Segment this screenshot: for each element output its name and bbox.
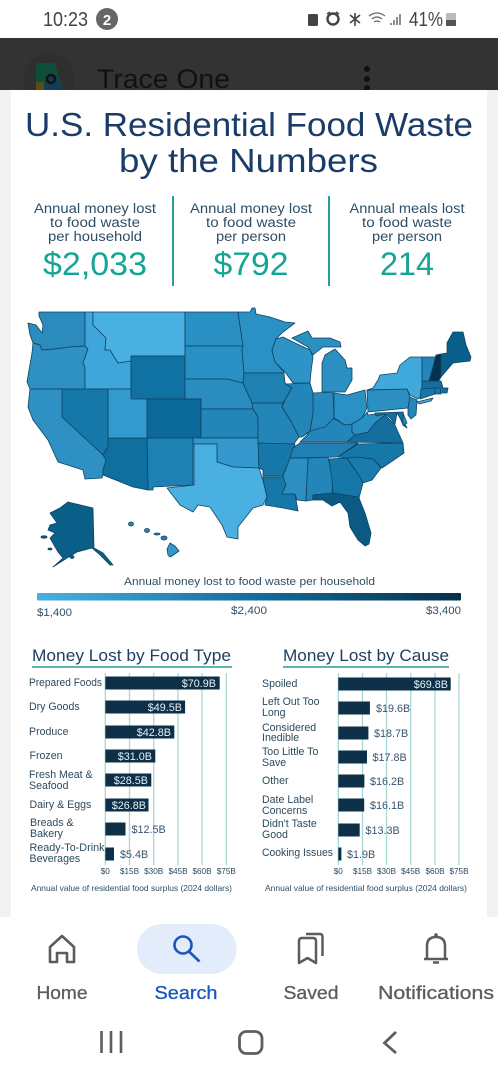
stat: meals: 214 <box>380 246 434 282</box>
chart: money lost by food type: $31.0B <box>118 751 152 763</box>
chart: money lost by cause: $16.2B <box>370 776 404 788</box>
stat: per person money: to food waste <box>206 215 296 230</box>
chart: money lost by cause: $30B <box>377 867 397 876</box>
chart: money lost by food type: Produce <box>29 726 69 738</box>
chart: money lost by cause: $15B <box>353 867 373 876</box>
chart: money lost by food type: $45B <box>168 867 188 876</box>
stat: per household <box>34 201 156 282</box>
chart: money lost by cause: Too Little To <box>262 746 318 758</box>
chart: money lost by food type: $28.5B <box>114 775 148 787</box>
nav item: home: Home <box>36 982 88 1003</box>
legend: household gradient scale: $1,400 <box>37 607 72 619</box>
chart: money lost by food type: Seafood <box>29 780 69 792</box>
chart: money lost by food type: $5.4B <box>120 849 148 861</box>
chart: money lost by food type: $0 <box>101 867 110 876</box>
chart heading: food type: Money Lost by Food Type <box>32 646 231 665</box>
dimmed app header: Trace One <box>97 64 230 94</box>
stat: meals: Annual meals lost <box>350 201 465 216</box>
title: U.S. Residential Food Waste <box>25 107 473 144</box>
chart: money lost by food type: Dry Goods <box>29 701 80 713</box>
android system buttons <box>102 1031 396 1054</box>
page background margins <box>0 90 498 917</box>
chart: money lost by cause: Concerns <box>262 805 307 817</box>
status bar: 2 <box>103 12 111 29</box>
chart: money lost by food type: $30B <box>144 867 164 876</box>
stat: per household: per household <box>48 229 142 244</box>
stat: per person money: Annual money lost <box>190 201 312 216</box>
status bar: 41% <box>409 9 443 31</box>
stat: per person money: per person <box>216 229 286 244</box>
chart: money lost by food type: $12.5B <box>132 824 166 836</box>
chart: money lost by food type: Fresh Meat & <box>29 769 93 781</box>
chart: money lost by cause: $16.1B <box>370 800 404 812</box>
stat: per person money <box>190 201 312 282</box>
dimmed app header <box>0 38 498 90</box>
chart: money lost by cause: $13.3B <box>366 825 400 837</box>
stat: per household: to food waste <box>50 215 140 230</box>
chart: money lost by cause: Save <box>262 757 286 769</box>
chart: money lost by cause: Annual value of residential food surplus (2024 dollars) <box>265 884 467 893</box>
nav item: notifications <box>378 933 494 1003</box>
chart: money lost by cause: $75B <box>449 867 469 876</box>
status bar <box>0 0 498 38</box>
map inset: Hawaii <box>128 522 179 557</box>
legend: household gradient scale: Annual money lost to food waste per household <box>124 576 375 588</box>
title <box>25 107 473 180</box>
chart: money lost by food type: $70.9B <box>182 678 216 690</box>
chart: money lost by cause: Didn't Taste <box>262 818 317 830</box>
chart: money lost by cause: Other <box>262 775 289 787</box>
chart: money lost by cause: $18.7B <box>374 728 408 740</box>
stat: per household: Annual money lost <box>34 201 156 216</box>
chart: money lost by food type: $26.8B <box>112 800 146 812</box>
chart: money lost by food type: Beverages <box>30 853 80 865</box>
chart heading: cause: Money Lost by Cause <box>283 646 449 665</box>
chart: money lost by food type <box>29 646 236 893</box>
stat: per household: $2,033 <box>43 246 147 282</box>
stat: meals <box>350 201 465 282</box>
chart: money lost by cause: $69.8B <box>414 679 448 691</box>
chart: money lost by food type: Annual value of residential food surplus (2024 dollars) <box>31 884 232 893</box>
status bar: 10:23 <box>43 9 88 31</box>
chart: money lost by food type: $15B <box>120 867 140 876</box>
chart: money lost by cause: Considered <box>262 722 316 734</box>
chart: money lost by cause: Spoiled <box>262 678 297 690</box>
chart: money lost by cause: $60B <box>425 867 445 876</box>
stat: meals: to food waste <box>362 215 452 230</box>
chart: money lost by food type: $49.5B <box>148 702 182 714</box>
chart: money lost by food type: Prepared Foods <box>29 677 102 689</box>
chart: money lost by food type: Breads & <box>30 817 74 829</box>
chart: money lost by cause: Date Label <box>262 794 313 806</box>
chart: money lost by food type: $60B <box>192 867 212 876</box>
chart: money lost by cause: Good <box>262 829 288 841</box>
chart: money lost by food type: $75B <box>217 867 236 876</box>
chart: money lost by cause: $19.6B <box>376 703 410 715</box>
legend: household gradient scale <box>37 576 461 619</box>
chart: money lost by cause: Left Out Too <box>262 696 320 708</box>
chart: money lost by cause: $0 <box>334 867 343 876</box>
chart: money lost by cause <box>262 646 469 893</box>
legend: household gradient scale: $3,400 <box>426 605 461 617</box>
chart: money lost by food type: $42.8B <box>137 727 171 739</box>
stat: meals: per person <box>372 229 442 244</box>
nav item: notifications: Notifications <box>378 982 494 1003</box>
title: by the Numbers <box>119 143 378 180</box>
map inset: Alaska <box>41 502 113 567</box>
chart: money lost by cause: $45B <box>401 867 421 876</box>
nav item: home <box>36 936 88 1003</box>
chart: money lost by cause: Cooking Issues <box>262 847 333 859</box>
chart: money lost by food type: Ready-To-Drink <box>30 842 105 854</box>
chart: money lost by cause: $1.9B <box>347 849 375 861</box>
nav item: saved <box>284 934 338 1003</box>
bottom navigation <box>0 917 498 1080</box>
legend: household gradient scale: $2,400 <box>231 605 267 617</box>
chart: money lost by cause: Inedible <box>262 732 299 744</box>
stat: per person money: $792 <box>214 246 288 282</box>
chart: money lost by food type: Bakery <box>30 828 64 840</box>
choropleth map of U.S. states <box>27 308 471 567</box>
nav item: search (active): Search <box>154 982 218 1003</box>
nav item: saved: Saved <box>284 982 338 1003</box>
chart: money lost by cause: $17.8B <box>372 752 407 764</box>
chart: money lost by food type: Dairy & Eggs <box>30 799 91 811</box>
chart: money lost by food type: Frozen <box>30 750 63 762</box>
chart: money lost by cause: Long <box>262 707 286 719</box>
nav item: search (active) <box>137 924 236 1003</box>
